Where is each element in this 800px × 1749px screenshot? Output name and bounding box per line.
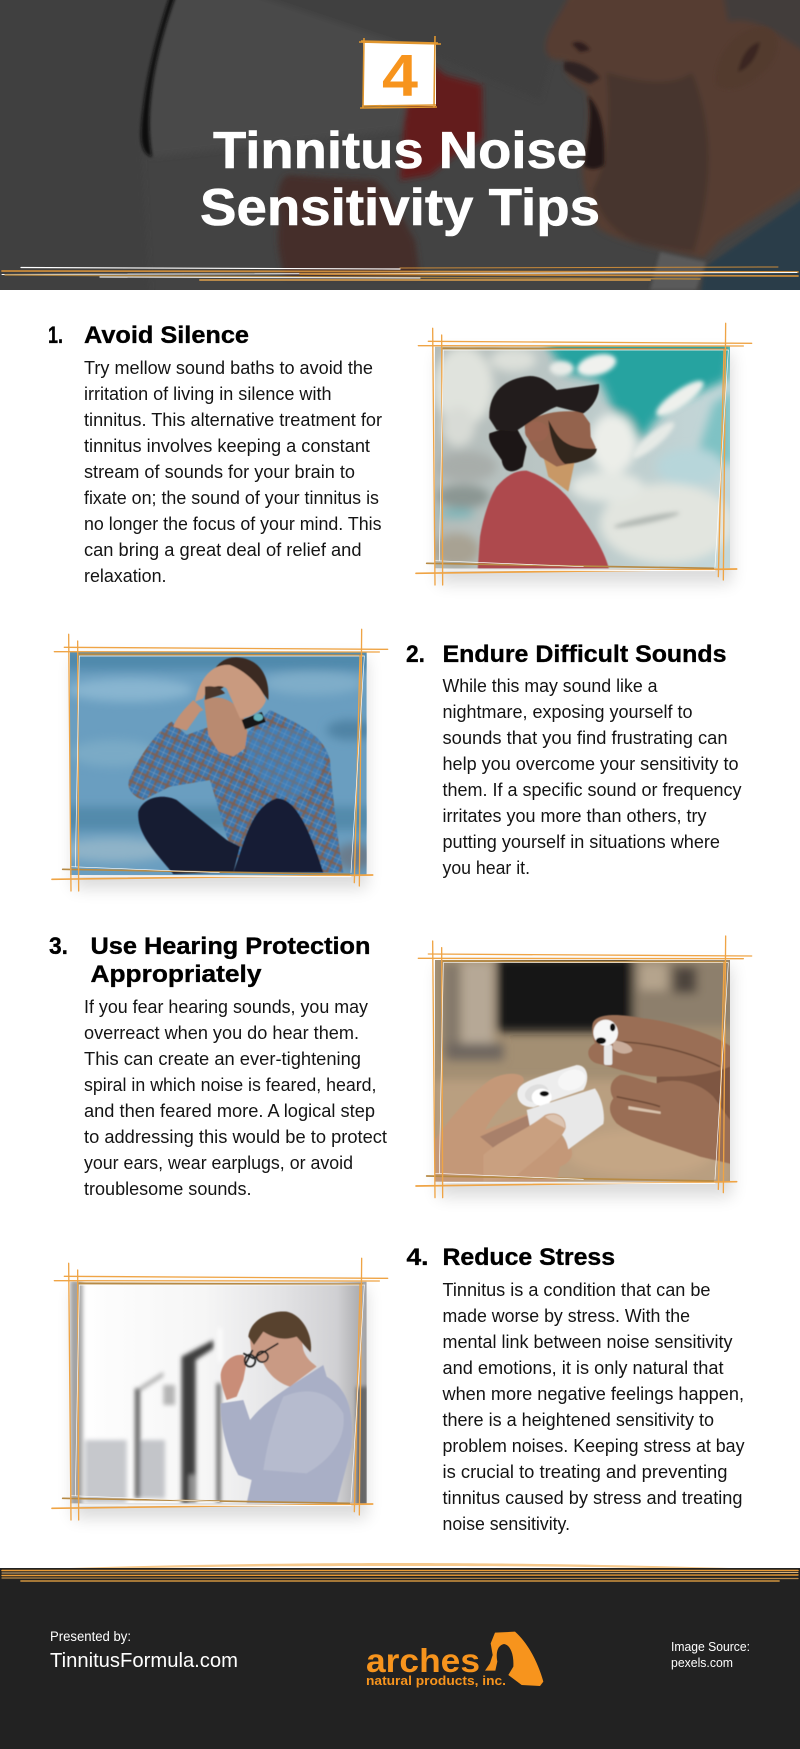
image source (671, 1639, 750, 1670)
body text: tip 2: you hear it. (442, 858, 530, 878)
logo: arches natural products (366, 1632, 543, 1688)
title (200, 122, 600, 237)
heading: Avoid Silence: Avoid Silence (84, 322, 249, 349)
body text: tip 2: them. If a specific sound or frequency (442, 780, 742, 800)
body text: tip 3: spiral in which noise is feared, heard, (84, 1075, 376, 1095)
body text: tip 3: to addressing this would be to protect (84, 1127, 387, 1147)
body text: tip 1: tinnitus. This alternative treatment for (84, 410, 382, 430)
body text: tip 2: irritates you more than others, try (442, 806, 706, 826)
footer band (0, 1563, 800, 1749)
presented by: TinnitusFormula.com (50, 1650, 238, 1672)
panel: tip 1 text (48, 322, 382, 586)
heading: Reduce Stress: 4. (406, 1244, 428, 1271)
header scribble lines (2, 267, 798, 280)
panel: tip 2 text (406, 641, 742, 878)
body text: tip 4: tinnitus caused by stress and treating (442, 1488, 742, 1508)
body text: tip 1: relaxation. (84, 566, 166, 586)
title: Tinnitus Noise (213, 122, 587, 180)
body text: tip 4: mental link between noise sensitivity (442, 1332, 732, 1352)
photo 1: man looking up at the sky (416, 323, 752, 585)
body text: tip 2: nightmare, exposing yourself to (442, 702, 692, 722)
body text: tip 3 (84, 997, 387, 1199)
body text: tip 3: troublesome sounds. (84, 1179, 252, 1199)
photo 3: hands holding wireless earbuds (416, 936, 752, 1198)
body text: tip 2 (442, 676, 742, 878)
heading: Use Hearing Protection Appropriately: 3. (49, 933, 68, 960)
body text: tip 3: If you fear hearing sounds, you may (84, 997, 368, 1017)
body text: tip 4: there is a heightened sensitivity to (442, 1410, 714, 1430)
body text: tip 4: Tinnitus is a condition that can be (442, 1280, 710, 1300)
title: Sensitivity Tips (200, 179, 600, 237)
photo 2: man holding his head by the water (52, 629, 388, 891)
panel: tip 3 text (49, 933, 387, 1199)
body text: tip 1: stream of sounds for your brain to (84, 462, 355, 482)
body text: tip 4: noise sensitivity. (442, 1514, 570, 1534)
image source: Image Source: (671, 1639, 750, 1654)
panel: tip 4 text (406, 1244, 744, 1534)
logo: arches natural products: arches (366, 1642, 480, 1679)
header photo: man shouting into megaphone (0, 0, 800, 300)
body text: tip 2: While this may sound like a (442, 676, 658, 696)
icon: delicate arch (485, 1632, 543, 1686)
heading: Reduce Stress: Reduce Stress (442, 1244, 615, 1271)
body text: tip 3: overreact when you do hear them. (84, 1023, 359, 1043)
body text: tip 1: Try mellow sound baths to avoid the (84, 358, 373, 378)
body text: tip 1: can bring a great deal of relief and (84, 540, 362, 560)
image source: pexels.com (671, 1655, 733, 1670)
footer scribble lines (2, 1563, 798, 1581)
body text: tip 2: help you overcome your sensitivity to (442, 754, 738, 774)
heading: Use Hearing Protection Appropriately: Use Hearing Protection (90, 933, 370, 960)
header banner (0, 0, 800, 300)
body text: tip 1: fixate on; the sound of your tinnitus is (84, 488, 379, 508)
body text: tip 1: tinnitus involves keeping a constant (84, 436, 370, 456)
number badge (359, 36, 441, 109)
body text: tip 4: and emotions, it is only natural that (442, 1358, 724, 1378)
heading: Endure Difficult Sounds: 2. (406, 641, 425, 668)
body text: tip 3: your ears, wear earplugs, or avoid (84, 1153, 353, 1173)
body text: tip 1 (84, 358, 382, 586)
body text: tip 1: no longer the focus of your mind. This (84, 514, 382, 534)
photo 4: man pinching his glasses in a bright hallway (52, 1258, 388, 1520)
body text: tip 3: This can create an ever-tightening (84, 1049, 361, 1069)
presented by: Presented by: (50, 1629, 131, 1644)
body text: tip 3: and then feared more. A logical step (84, 1101, 375, 1121)
body text: tip 4 (441, 1280, 744, 1534)
logo: arches natural products: natural products, inc. (366, 1674, 506, 1688)
heading: Use Hearing Protection Appropriately: Appropriately (90, 961, 262, 988)
body text: tip 4: problem noises. Keeping stress at bay (442, 1436, 744, 1456)
body text: tip 1: irritation of living in silence with (84, 384, 332, 404)
heading: Avoid Silence: 1. (48, 322, 63, 349)
body text: tip 4: made worse by stress. With the (442, 1306, 690, 1326)
body text: tip 4: is crucial to treating and preventing (442, 1462, 728, 1482)
heading: Use Hearing Protection Appropriately (49, 933, 370, 988)
number badge: 4 (382, 43, 418, 109)
body text: tip 2: sounds that you find frustrating can (442, 728, 728, 748)
heading: Endure Difficult Sounds: Endure Difficult Sounds (442, 641, 726, 668)
body text: tip 2: putting yourself in situations where (442, 832, 720, 852)
body text: tip 4: when more negative feelings happen, (441, 1384, 744, 1404)
presented by (50, 1629, 238, 1672)
